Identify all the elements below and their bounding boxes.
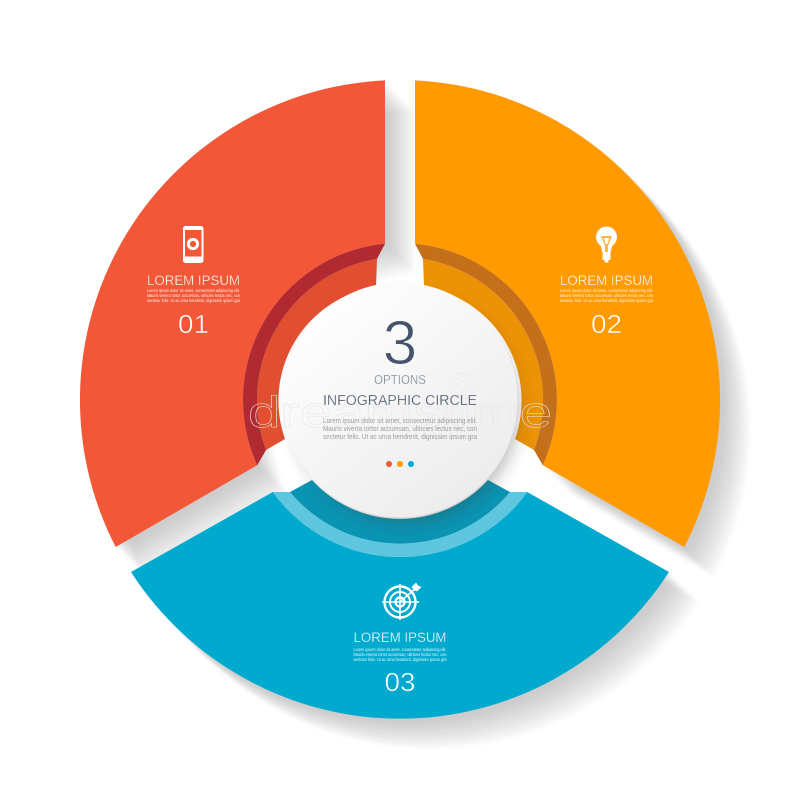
text block: segment 02: Mauris viverra tortor accumsan, ultricies lectus nec, con [560, 293, 653, 298]
heading: lorem ipsum 03: LOREM IPSUM [354, 629, 446, 645]
text block: segment 02 [560, 288, 653, 303]
panel: segment 01 red [80, 80, 385, 547]
heading: lorem ipsum 02: LOREM IPSUM [560, 272, 653, 288]
panel: center circle [248, 282, 552, 518]
text block: segment 02: sectetur felis. Ut ac urna hendrerit, dignissim ipsum gra [560, 298, 653, 303]
inner ring: blue light [273, 492, 527, 557]
inner ring: orange dark [415, 244, 557, 465]
text block: segment 02: Lorem ipsum dolor sit amet, consectetur adipiscing elit. [560, 288, 653, 293]
options label: OPTIONS [374, 373, 426, 387]
inner ring: red light [257, 259, 377, 450]
icon: smartphone [183, 226, 204, 263]
three color dots [386, 461, 414, 467]
number 03: 03 [384, 667, 416, 697]
inner ring: orange light [423, 259, 543, 450]
number 02: 02 [591, 309, 622, 339]
watermark: dreamstime [248, 388, 552, 437]
text block: segment 01 [147, 288, 240, 303]
text block: center: Lorem ipsum dolor sit amet, consectetur adipiscing elit. [323, 418, 477, 425]
panel: segment 03 blue [131, 480, 669, 719]
icon: target with arrow [382, 583, 421, 620]
number 01: 01 [178, 309, 209, 339]
watermark [248, 373, 552, 437]
icon: light bulb [596, 226, 617, 262]
heading: infographic circle: INFOGRAPHIC CIRCLE [323, 392, 477, 409]
inner ring: red dark [243, 244, 385, 465]
inner ring: blue dark [290, 480, 510, 544]
text block: segment 03 [354, 647, 447, 662]
text block: segment 01: sectetur felis. Ut ac urna hendrerit, dignissim ipsum gra [147, 298, 240, 303]
text block: segment 01: Mauris viverra tortor accumsan, ultricies lectus nec, con [147, 293, 240, 298]
text block: segment 03: Mauris viverra tortor accumsan, ultricies lectus nec, con [354, 652, 447, 657]
panel: segment 02 orange [415, 80, 720, 547]
long shadows behind segments [82, 83, 750, 749]
text block: center: Mauris viverra tortor accumsan, ultricies lectus nec, con [323, 426, 477, 433]
text block: segment 03: sectetur felis. Ut ac urna hendrerit, dignissim ipsum gra [354, 657, 447, 662]
text block: center: sectetur felis. Ut ac urna hendrerit, dignissim ipsum gra [323, 434, 477, 441]
big number 3: 3 [383, 309, 417, 378]
text block: center [323, 418, 477, 441]
heading: lorem ipsum 01: LOREM IPSUM [147, 272, 240, 288]
text block: segment 03: Lorem ipsum dolor sit amet, consectetur adipiscing elit. [354, 647, 446, 652]
text block: segment 01: Lorem ipsum dolor sit amet, consectetur adipiscing elit. [147, 288, 240, 293]
center disc shadow [291, 294, 521, 524]
